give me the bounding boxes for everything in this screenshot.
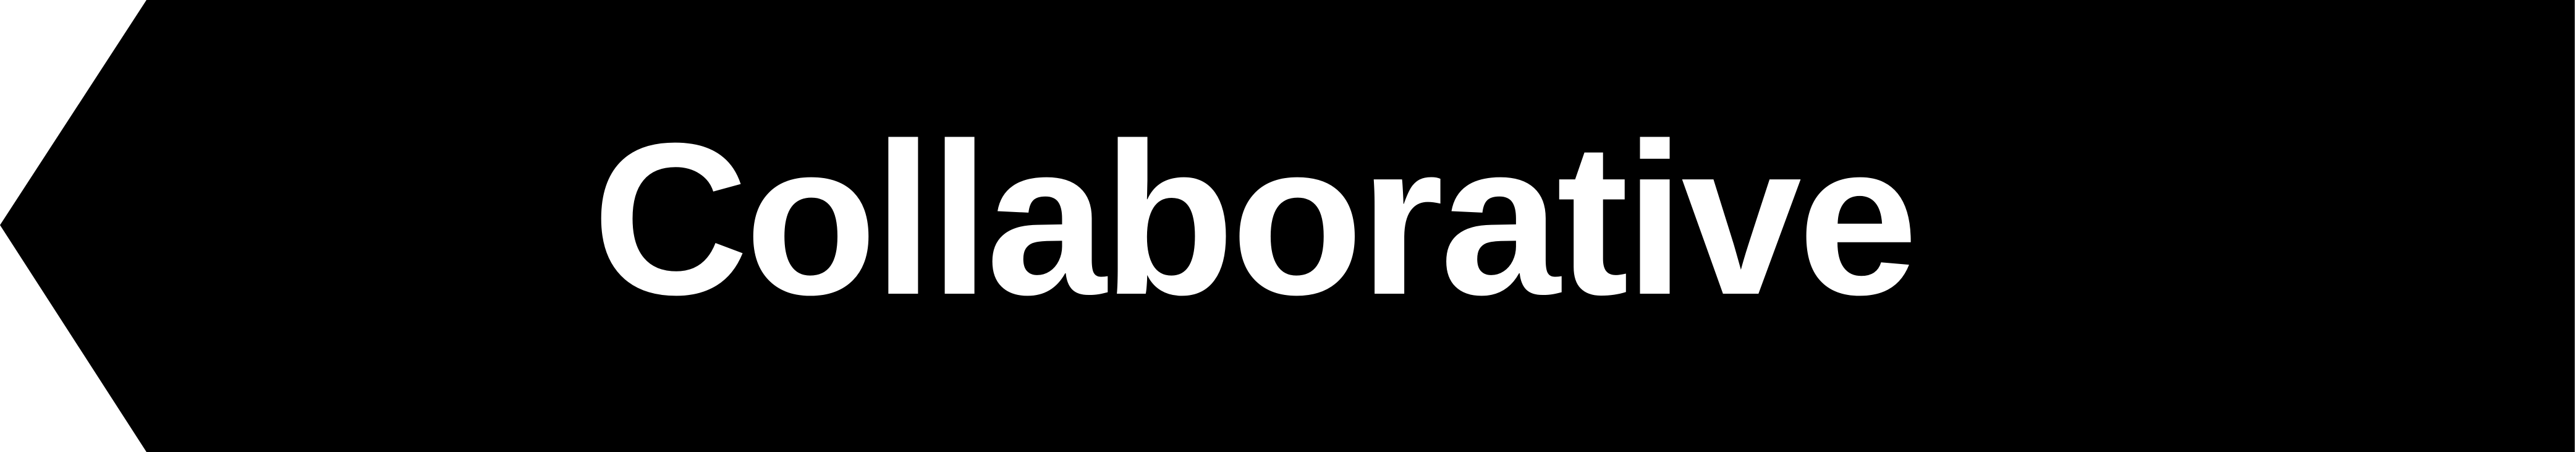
title: Collaborative: Collaborative (592, 98, 1915, 340)
